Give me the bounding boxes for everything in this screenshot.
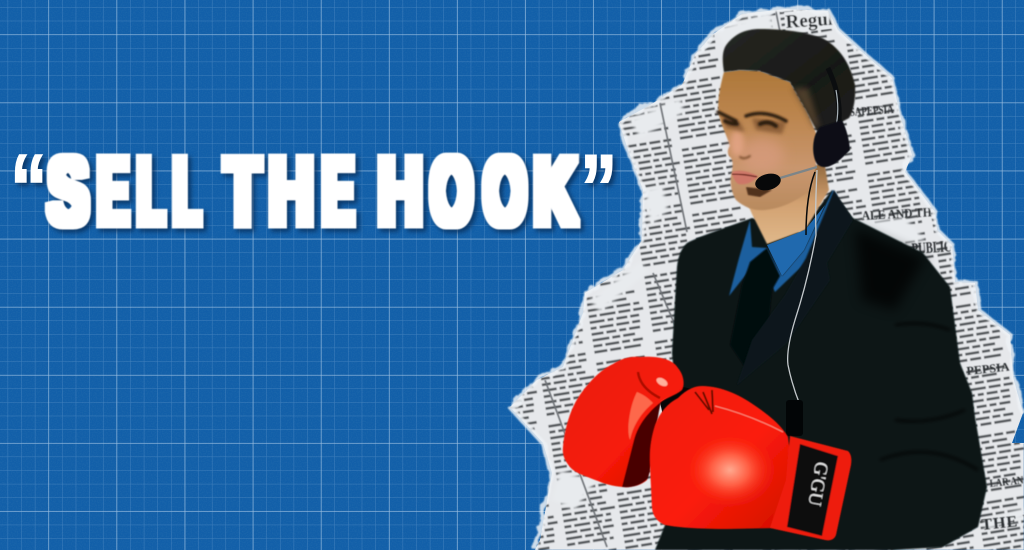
man in suit with headset: [655, 29, 987, 550]
front glove: [650, 386, 851, 540]
neck: [744, 160, 829, 244]
title: E: [98, 138, 128, 245]
rear glove thumb: [655, 376, 669, 388]
cuff: [770, 436, 851, 540]
title: H: [378, 138, 422, 245]
newspaper headlines: PEPSIA: [966, 360, 1010, 378]
title: S: [48, 138, 88, 245]
suit jacket: [655, 190, 987, 550]
newspaper headlines: PUBLIC: [911, 238, 952, 258]
cheek highlight: [740, 138, 784, 172]
rear glove shadow: [622, 402, 661, 487]
shirt collar fold: [767, 205, 825, 276]
title: O: [484, 138, 526, 245]
torn white edge: [510, 9, 1023, 550]
jacket shading: [855, 228, 925, 310]
sleeve fold: [880, 323, 978, 470]
headband: [828, 68, 839, 128]
blue shirt: [729, 190, 837, 296]
boxing gloves: [563, 357, 851, 540]
mic shadow: [746, 187, 772, 197]
eyes and brows: [718, 112, 786, 158]
newspaper headlines: [784, 8, 1024, 534]
title: K: [534, 138, 576, 245]
title: “: [10, 135, 47, 242]
white margins of paper: [552, 12, 1024, 530]
necktie: [730, 248, 780, 372]
ear cup: [813, 120, 850, 167]
newspaper headlines: SAPEPSIA: [849, 102, 894, 119]
temple fade: [792, 88, 820, 128]
title: [10, 135, 618, 245]
headset: [753, 68, 850, 436]
mic foam: [753, 171, 783, 193]
cable: [788, 170, 817, 405]
cable clip: [786, 400, 803, 436]
torn newspaper collage: [500, 0, 1024, 550]
jacket lapel: [737, 190, 853, 385]
mouth: [732, 171, 758, 184]
title: ”: [580, 135, 617, 242]
column rules: [545, 7, 892, 550]
newspaper headlines: ALE AND TH: [861, 204, 932, 223]
title: H: [269, 138, 313, 245]
nose highlight: [730, 130, 744, 156]
glove seam: [715, 406, 783, 432]
title: T: [225, 138, 260, 245]
eye socket shadow: [722, 116, 786, 134]
label text: G'GU: [803, 460, 832, 508]
hair: [723, 29, 855, 131]
newspaper headlines: Regula: [785, 8, 844, 33]
title: E: [323, 138, 353, 245]
rear glove side highlight: [628, 392, 653, 440]
dark wrist between gloves: [660, 387, 705, 425]
glove highlight: [684, 432, 776, 508]
title: L: [174, 138, 200, 245]
title: L: [138, 138, 164, 245]
rear glove: [563, 357, 684, 487]
cuff label: [787, 444, 838, 536]
face: [718, 70, 819, 210]
glove crease: [695, 390, 713, 414]
title: O: [431, 138, 472, 245]
newsprint body: [500, 0, 1024, 550]
mic boom: [780, 167, 817, 178]
